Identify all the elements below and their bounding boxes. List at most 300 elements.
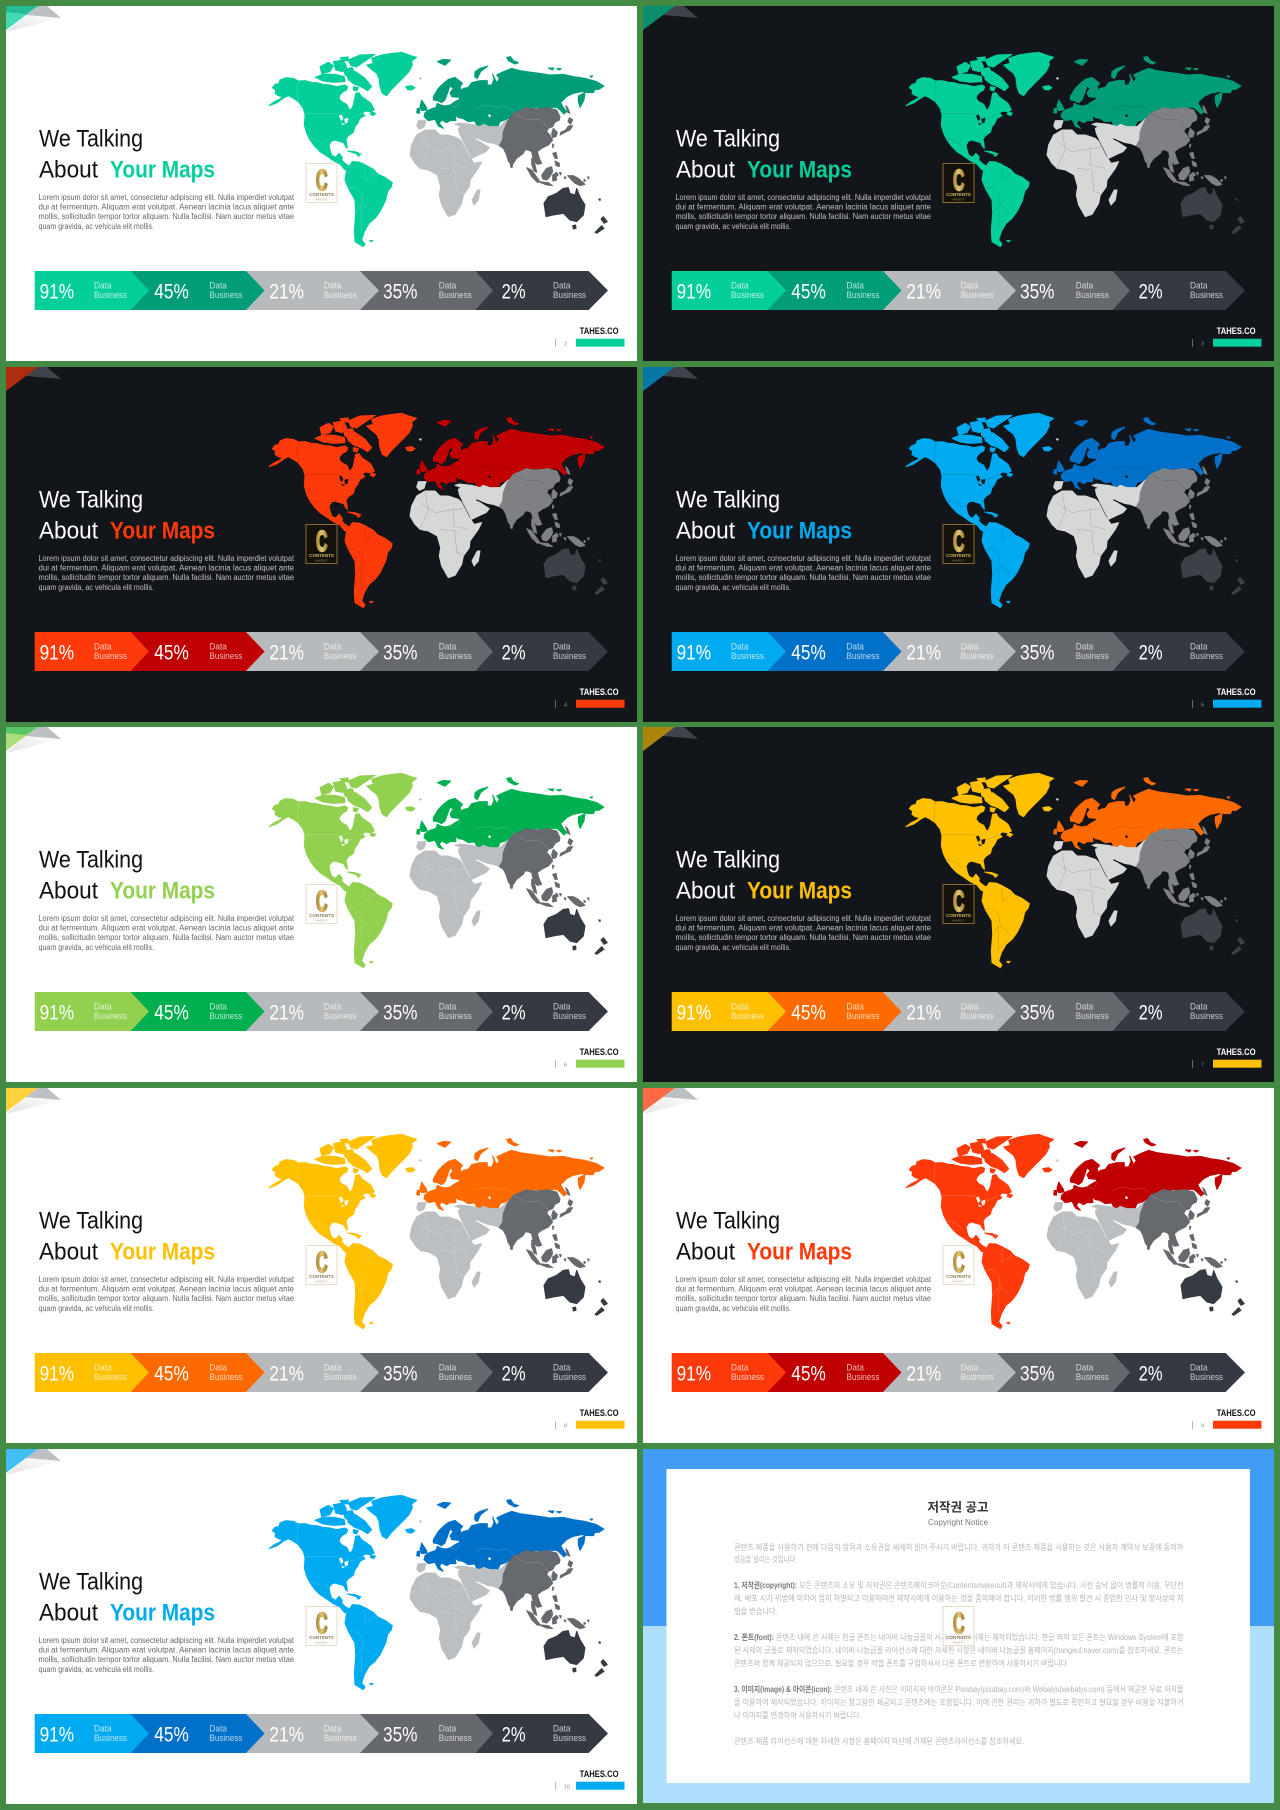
- chevron 45%: [131, 271, 264, 310]
- heading: About: [676, 157, 735, 184]
- heading: About: [39, 518, 98, 545]
- chevron 45%: [131, 632, 264, 671]
- logo: C: [316, 886, 328, 918]
- footer: 2: [564, 342, 567, 348]
- chevron 45%: [768, 1353, 902, 1392]
- chevron 91%: [35, 271, 149, 310]
- corner decoration: [643, 367, 698, 391]
- logo: CONTENTS: [946, 913, 971, 918]
- chevron 35%: [997, 992, 1130, 1031]
- chevron 91%: Business: [731, 1011, 764, 1022]
- logo: MAKEOUT: [315, 1280, 328, 1284]
- chevron 91%: [672, 632, 786, 671]
- chevron 21%: 21%: [906, 1363, 941, 1386]
- chevron 45%: [131, 992, 264, 1031]
- corner decoration: [6, 1088, 61, 1114]
- chevron 2%: 2%: [1139, 281, 1163, 304]
- logo: MAKEOUT: [952, 1280, 965, 1284]
- chevron 45%: 45%: [154, 281, 189, 304]
- chevron 35%: [360, 1353, 493, 1392]
- chevron 91%: 91%: [677, 1363, 711, 1386]
- copyright section 3: 을 이용하여 제작되었습니다. 이미지는 참고용만 제공되고 콘텐츠에는 포함됩니다. 이에 관한 권리는 귀하가 별도로 확인하고 필요할 경우 비용을 지불하거: [734, 1697, 1184, 1707]
- chevron 91%: Business: [731, 1372, 764, 1383]
- world map: [269, 413, 607, 608]
- body text: [38, 193, 295, 231]
- chevron 45%: Business: [846, 290, 880, 301]
- chevron 91%: Business: [94, 1372, 127, 1383]
- corner decoration: [6, 367, 61, 391]
- body text: [676, 914, 932, 952]
- chevron 45%: Business: [846, 1372, 880, 1383]
- heading: About: [676, 518, 735, 545]
- chevron 2%: [1112, 992, 1245, 1031]
- chevron 35%: Data: [439, 281, 457, 292]
- body text: quam gravida, ac vehicula elit mollis.: [38, 943, 154, 952]
- chevron 35%: Data: [1076, 1363, 1094, 1374]
- body text: quam gravida, ac vehicula elit mollis.: [676, 943, 791, 952]
- footer: TAHES.CO: [1217, 1408, 1256, 1419]
- panel: slide 4 dark red: [6, 367, 637, 722]
- chevron 21%: Business: [961, 651, 994, 662]
- logo: CONTENTS: [946, 192, 971, 197]
- chevron 21%: Business: [961, 1372, 994, 1383]
- chevron 45%: Data: [846, 642, 865, 653]
- footer: 5: [1201, 702, 1204, 708]
- chevron 21%: 21%: [269, 1002, 304, 1025]
- copyright section 1: [734, 1580, 1184, 1616]
- chevron 35%: 35%: [383, 642, 418, 665]
- world map: [906, 773, 1244, 968]
- chevron 21%: [246, 271, 379, 310]
- chevron 35%: Business: [439, 290, 472, 301]
- chevron 45%: Business: [209, 1733, 243, 1744]
- body text: Lorem ipsum dolor sit amet, consectetur adipiscing elit. Nulla imperdiet volutpat: [676, 914, 932, 923]
- footer: [1192, 326, 1262, 348]
- chevron 35%: Business: [1076, 290, 1109, 301]
- panel: slide 6 white green: [6, 727, 637, 1082]
- body text: mollis, sollicitudin tempor tortor aliquam. Nulla facilisi. Nam auctor metus vitae: [38, 1294, 295, 1303]
- chevron 21%: Data: [961, 1002, 979, 1013]
- body text: dui at fermentum. Aliquam erat volutpat. Aenean lacinia lacus aliquet ante: [38, 564, 295, 572]
- copyright section 2: 2. 폰트(font):: [734, 1633, 774, 1642]
- body text: dui at fermentum. Aliquam erat volutpat. Aenean lacinia lacus aliquet ante: [676, 1284, 932, 1294]
- copyright section 3: 나 이미지를 변경하여 사용하시기 바랍니다.: [734, 1710, 862, 1720]
- panel: slide 9 white red: [643, 1088, 1274, 1443]
- chevron 91%: Business: [731, 651, 764, 662]
- chevron 2%: 2%: [502, 1724, 526, 1747]
- heading: About: [39, 1600, 98, 1627]
- chevron 21%: 21%: [906, 281, 941, 304]
- world map: [269, 52, 607, 247]
- chevron 45%: Data: [209, 1002, 228, 1013]
- chevron 21%: [883, 632, 1016, 671]
- chevron 45%: [768, 992, 902, 1031]
- chevron 2%: [1112, 632, 1245, 671]
- logo: [306, 1246, 337, 1284]
- chevron 2%: Business: [553, 1372, 586, 1383]
- copyright title: 저작권 공고: [928, 1500, 988, 1515]
- footer: TAHES.CO: [580, 326, 619, 337]
- chevron 2%: Business: [553, 290, 586, 301]
- logo: C: [316, 526, 328, 558]
- body text: quam gravida, ac vehicula elit mollis.: [38, 1304, 154, 1313]
- footer: 9: [1201, 1424, 1204, 1430]
- copyright section 2: 된 서체의 글꼴로 제작되었습니다. 네이버 나눔글꼴 라이선스에 대한 자세한 사항은 네이버 나눔글꼴 홈페이지(hangeul.naver.com)를 참조하세요. 폰트는: [734, 1645, 1184, 1655]
- footer: TAHES.CO: [580, 1408, 619, 1419]
- chevron 91%: Data: [731, 1002, 749, 1013]
- panel: slide 8 white orange: [6, 1088, 637, 1443]
- body text: dui at fermentum. Aliquam erat volutpat. Aenean lacinia lacus aliquet ante: [38, 202, 295, 212]
- chevron 35%: Business: [439, 1733, 472, 1744]
- chevron 21%: 21%: [269, 281, 304, 304]
- body text: mollis, sollicitudin tempor tortor aliquam. Nulla facilisi. Nam auctor metus vitae: [38, 573, 295, 582]
- chevron 21%: Data: [324, 642, 342, 653]
- heading: About: [676, 878, 735, 905]
- logo: [306, 884, 337, 924]
- panel: slide 10 white blue: [6, 1449, 637, 1804]
- chevron 21%: Business: [961, 290, 994, 301]
- chevron 2%: Data: [1190, 642, 1208, 653]
- footer: TAHES.CO: [580, 1047, 619, 1058]
- footer: [1192, 687, 1262, 708]
- chevron 45%: [768, 271, 902, 310]
- chevron 91%: 91%: [40, 281, 74, 304]
- footer: 3: [1201, 342, 1204, 348]
- body text: Lorem ipsum dolor sit amet, consectetur adipiscing elit. Nulla imperdiet volutpat: [676, 193, 932, 202]
- copyright title: [928, 1500, 988, 1527]
- logo: CONTENTS: [946, 1635, 971, 1640]
- world map: [906, 413, 1244, 608]
- body text: mollis, sollicitudin tempor tortor aliquam. Nulla facilisi. Nam auctor metus vitae: [38, 212, 295, 221]
- heading: We Talking: [676, 487, 780, 514]
- footer: 4: [564, 702, 567, 708]
- chevron 45%: Business: [209, 1372, 243, 1383]
- body text: mollis, sollicitudin tempor tortor aliquam. Nulla facilisi. Nam auctor metus vitae: [676, 1294, 932, 1303]
- chevron 2%: 2%: [502, 642, 526, 665]
- chevron bar: [672, 271, 1245, 310]
- body text: quam gravida, ac vehicula elit mollis.: [38, 1665, 154, 1674]
- logo: [306, 1606, 337, 1646]
- logo: MAKEOUT: [952, 560, 965, 562]
- chevron 2%: Data: [1190, 1363, 1208, 1374]
- chevron 21%: [246, 1353, 379, 1392]
- body text: Lorem ipsum dolor sit amet, consectetur adipiscing elit. Nulla imperdiet volutpat: [38, 1636, 295, 1645]
- corner decoration: [643, 6, 698, 30]
- chevron 21%: [883, 1353, 1016, 1392]
- chevron bar: [35, 1714, 608, 1753]
- copyright section 1: 모든 콘텐츠의 소유 및 저작권은 콘텐츠메이크아웃(Contentsmakeout)과 제작사에게 있습니다. 사전 승낙 없이 법률적 이용, 무단전: [799, 1580, 1184, 1590]
- chevron 35%: Data: [1076, 1002, 1094, 1013]
- chevron 35%: [360, 632, 493, 671]
- body text: mollis, sollicitudin tempor tortor aliquam. Nulla facilisi. Nam auctor metus vitae: [676, 573, 932, 582]
- chevron 35%: 35%: [383, 1724, 418, 1747]
- chevron 35%: 35%: [1020, 1363, 1054, 1386]
- heading: Your Maps: [110, 518, 215, 545]
- chevron 35%: [360, 1714, 493, 1753]
- chevron 35%: Business: [439, 1011, 472, 1022]
- logo: CONTENTS: [946, 1274, 971, 1279]
- chevron 2%: 2%: [502, 1002, 526, 1025]
- chevron bar: [35, 271, 608, 310]
- panel: slide 5 dark blue: [643, 367, 1274, 722]
- body text: quam gravida, ac vehicula elit mollis.: [38, 583, 154, 592]
- world map: [906, 1134, 1244, 1329]
- chevron 45%: Data: [846, 1363, 865, 1374]
- chevron 21%: Business: [324, 290, 357, 301]
- chevron 91%: 91%: [40, 642, 74, 665]
- chevron 45%: 45%: [791, 1002, 826, 1025]
- chevron 45%: Business: [209, 290, 243, 301]
- chevron 91%: 91%: [677, 281, 711, 304]
- heading: We Talking: [39, 847, 143, 874]
- chevron 91%: [35, 1714, 149, 1753]
- heading: [39, 487, 215, 545]
- body text: mollis, sollicitudin tempor tortor aliquam. Nulla facilisi. Nam auctor metus vitae: [676, 933, 932, 942]
- logo: [943, 524, 974, 564]
- chevron 91%: Data: [94, 642, 112, 653]
- heading: Your Maps: [110, 157, 215, 184]
- corner decoration: [6, 1449, 61, 1475]
- heading: [676, 126, 852, 184]
- chevron 35%: 35%: [383, 1002, 418, 1025]
- panel: slide 7 dark orange: [643, 727, 1274, 1082]
- logo: C: [316, 165, 328, 197]
- copyright title: Copyright Notice: [928, 1517, 988, 1527]
- chevron 45%: Data: [209, 1363, 228, 1374]
- chevron 35%: [997, 632, 1130, 671]
- corner decoration: [6, 727, 61, 753]
- heading: Your Maps: [110, 1600, 215, 1627]
- chevron bar: [35, 992, 608, 1031]
- chevron 21%: 21%: [906, 1002, 941, 1025]
- chevron 91%: [672, 271, 786, 310]
- body text: Lorem ipsum dolor sit amet, consectetur adipiscing elit. Nulla imperdiet volutpat: [38, 193, 295, 202]
- chevron 2%: Business: [1190, 651, 1223, 662]
- logo: [943, 884, 974, 924]
- copyright section 1: 벌을 받습니다.: [734, 1606, 778, 1616]
- body text: dui at fermentum. Aliquam erat volutpat. Aenean lacinia lacus aliquet ante: [38, 1284, 295, 1294]
- footer: TAHES.CO: [1217, 326, 1256, 337]
- panel: slide 3 dark teal: [643, 6, 1274, 361]
- body text: Lorem ipsum dolor sit amet, consectetur adipiscing elit. Nulla imperdiet volutpat: [38, 554, 295, 563]
- chevron 91%: Data: [94, 1002, 112, 1013]
- logo: MAKEOUT: [952, 198, 965, 202]
- chevron 91%: [35, 1353, 149, 1392]
- chevron 35%: Business: [439, 1372, 472, 1383]
- heading: Your Maps: [110, 878, 215, 905]
- heading: [39, 1208, 215, 1266]
- chevron bar: [35, 1353, 608, 1392]
- chevron 35%: [997, 1353, 1130, 1392]
- chevron 45%: [131, 1714, 264, 1753]
- chevron 35%: Data: [1076, 281, 1094, 292]
- chevron 2%: Data: [553, 1724, 571, 1735]
- chevron 2%: Data: [553, 1363, 571, 1374]
- footer: TAHES.CO: [580, 687, 619, 698]
- heading: [39, 847, 215, 905]
- chevron 45%: 45%: [791, 642, 826, 665]
- heading: We Talking: [676, 1208, 780, 1235]
- body text: [38, 1275, 295, 1313]
- chevron 21%: Data: [324, 1724, 342, 1735]
- logo: C: [953, 1247, 965, 1279]
- logo: [943, 1606, 974, 1646]
- world map: [906, 52, 1244, 247]
- copyright section 3: [734, 1684, 1184, 1720]
- chevron 35%: 35%: [1020, 642, 1054, 665]
- footer: [555, 1047, 624, 1068]
- chevron 91%: [672, 992, 786, 1031]
- chevron 21%: 21%: [269, 642, 304, 665]
- chevron 2%: [476, 1714, 608, 1753]
- body text: [38, 1636, 295, 1674]
- chevron 2%: [1112, 1353, 1245, 1392]
- chevron 91%: Business: [94, 651, 127, 662]
- heading: [676, 487, 852, 545]
- chevron 2%: Data: [553, 1002, 571, 1013]
- chevron 2%: [476, 632, 608, 671]
- copyright section 2: 콘텐츠 내에 쓴 서체는 한글 폰트는 네이버 나눔글꼴의 서체로, 영문서체는 제작되었습니다. 한글 외의 모든 폰트는 Windows System에 포함: [776, 1632, 1184, 1642]
- chevron 35%: Business: [1076, 1011, 1109, 1022]
- chevron bar: [672, 1353, 1245, 1392]
- logo: C: [316, 1247, 328, 1279]
- chevron 45%: Data: [846, 281, 865, 292]
- chevron 21%: [246, 1714, 379, 1753]
- heading: We Talking: [676, 126, 780, 153]
- logo: C: [953, 886, 965, 918]
- chevron 2%: 2%: [1139, 1363, 1163, 1386]
- footer: [555, 1769, 624, 1790]
- logo: MAKEOUT: [952, 1642, 965, 1644]
- chevron 91%: [35, 632, 149, 671]
- body text: dui at fermentum. Aliquam erat volutpat. Aenean lacinia lacus aliquet ante: [676, 564, 932, 572]
- footer: 7: [1201, 1062, 1204, 1068]
- chevron 91%: Data: [94, 1724, 112, 1735]
- chevron bar: [672, 992, 1245, 1031]
- heading: Your Maps: [110, 1239, 215, 1266]
- chevron 2%: Data: [1190, 1002, 1208, 1013]
- logo: MAKEOUT: [315, 920, 328, 922]
- chevron 45%: Data: [209, 281, 228, 292]
- chevron 2%: Data: [1190, 281, 1208, 292]
- chevron 45%: Data: [209, 1724, 228, 1735]
- chevron 35%: 35%: [383, 1363, 418, 1386]
- footer: TAHES.CO: [1217, 687, 1256, 698]
- heading: About: [39, 878, 98, 905]
- footer: [1192, 1408, 1262, 1430]
- chevron 45%: [768, 632, 902, 671]
- panel: slide 2 white teal: [6, 6, 637, 361]
- chevron 35%: Data: [1076, 642, 1094, 653]
- copyright section 2: [734, 1632, 1184, 1668]
- chevron 35%: [360, 992, 493, 1031]
- copyright section 2: 콘텐츠와 함께 제공되지 않으므로, 필요할 경우 적합 폰트를 구입하셔서 다른 폰트로 변환하여 사용하시기 바랍니다.: [734, 1658, 1069, 1668]
- world map: [269, 1134, 607, 1329]
- body text: mollis, sollicitudin tempor tortor aliquam. Nulla facilisi. Nam auctor metus vitae: [38, 933, 295, 942]
- chevron 91%: 91%: [677, 642, 711, 665]
- footer: TAHES.CO: [1217, 1047, 1256, 1058]
- body text: Lorem ipsum dolor sit amet, consectetur adipiscing elit. Nulla imperdiet volutpat: [676, 1275, 932, 1284]
- chevron 45%: 45%: [154, 1002, 189, 1025]
- body text: Lorem ipsum dolor sit amet, consectetur adipiscing elit. Nulla imperdiet volutpat: [38, 914, 295, 923]
- body text: dui at fermentum. Aliquam erat volutpat. Aenean lacinia lacus aliquet ante: [38, 924, 295, 932]
- body text: dui at fermentum. Aliquam erat volutpat. Aenean lacinia lacus aliquet ante: [676, 924, 932, 932]
- logo: CONTENTS: [309, 913, 334, 918]
- chevron 91%: Data: [731, 1363, 749, 1374]
- logo: CONTENTS: [309, 192, 334, 197]
- chevron 2%: [476, 1353, 608, 1392]
- chevron 2%: [476, 992, 608, 1031]
- chevron 21%: Data: [961, 1363, 979, 1374]
- chevron 35%: [360, 271, 493, 310]
- chevron 91%: 91%: [677, 1002, 711, 1025]
- chevron 91%: 91%: [40, 1002, 74, 1025]
- corner decoration: [6, 6, 61, 32]
- chevron 21%: Business: [324, 1011, 357, 1022]
- chevron 45%: 45%: [154, 1363, 189, 1386]
- footer: [555, 1408, 624, 1430]
- footer: [555, 326, 624, 348]
- chevron 21%: Data: [324, 1363, 342, 1374]
- chevron 21%: Business: [961, 1011, 994, 1022]
- body text: [38, 914, 295, 952]
- chevron 91%: Data: [94, 281, 112, 292]
- footer: 10: [564, 1784, 570, 1790]
- copyright intro: 셨음을 알리는 것입니다.: [734, 1554, 797, 1564]
- chevron 2%: Business: [1190, 1372, 1223, 1383]
- chevron 21%: [883, 992, 1016, 1031]
- heading: Your Maps: [747, 157, 852, 184]
- logo: C: [316, 1608, 328, 1640]
- logo: [306, 164, 337, 202]
- chevron 35%: Data: [439, 1363, 457, 1374]
- chevron 21%: 21%: [269, 1363, 304, 1386]
- body text: mollis, sollicitudin tempor tortor aliquam. Nulla facilisi. Nam auctor metus vitae: [38, 1655, 295, 1664]
- logo: C: [953, 1608, 965, 1640]
- chevron 35%: 35%: [1020, 1002, 1054, 1025]
- body text: quam gravida, ac vehicula elit mollis.: [38, 222, 154, 231]
- chevron bar: [35, 632, 608, 671]
- copyright section 1: 1. 저작권(copyright):: [734, 1580, 797, 1590]
- copyright intro: 콘텐츠 제품을 사용하기 전에 다음의 항목과 소유권을 세세히 읽어 주시기 바랍니다. 귀하가 이 콘텐츠 제품을 사용하는 것은 사용자 계약서 보증에 동의하: [734, 1542, 1184, 1552]
- logo: CONTENTS: [946, 553, 971, 558]
- chevron 45%: Data: [846, 1002, 865, 1013]
- chevron 21%: Data: [324, 1002, 342, 1013]
- heading: About: [39, 1239, 98, 1266]
- chevron 45%: Business: [209, 651, 243, 662]
- heading: [676, 1208, 852, 1266]
- chevron 2%: [1112, 271, 1245, 310]
- logo: MAKEOUT: [315, 560, 328, 562]
- footer: [555, 687, 624, 708]
- body text: [676, 193, 932, 231]
- body text: dui at fermentum. Aliquam erat volutpat. Aenean lacinia lacus aliquet ante: [38, 1646, 295, 1654]
- chevron 2%: Business: [1190, 1011, 1223, 1022]
- chevron 2%: Business: [553, 1011, 586, 1022]
- world map: [269, 1495, 607, 1690]
- chevron 2%: Data: [553, 281, 571, 292]
- chevron 91%: Business: [94, 290, 127, 301]
- copyright section 3: 콘텐츠 내에 쓴 사진은 이미지와 아이콘은 Pixabay(pixabay.com)와 Webalys(webalys.com) 등에서 제공한 무료 저작물: [834, 1684, 1184, 1694]
- chevron 35%: Business: [1076, 651, 1109, 662]
- chevron 45%: Business: [846, 1011, 880, 1022]
- chevron 2%: Data: [553, 642, 571, 653]
- chevron 35%: 35%: [383, 281, 418, 304]
- chevron 2%: [476, 271, 608, 310]
- chevron 21%: Business: [324, 1733, 357, 1744]
- footer: TAHES.CO: [580, 1769, 619, 1780]
- chevron 21%: Data: [961, 281, 979, 292]
